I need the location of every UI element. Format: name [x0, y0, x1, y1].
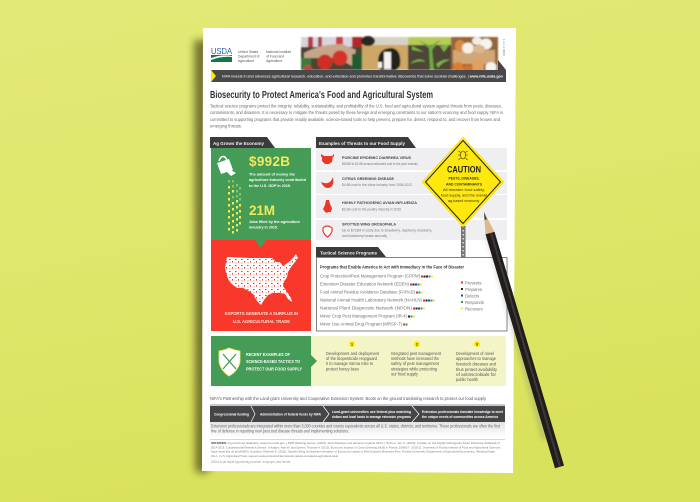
process chevron bar: Land-grant universities use federal plus matching: [332, 409, 412, 414]
program list: Food Animal Residue Avoidance Database (FARAD): [320, 290, 416, 294]
panel: ag grows the economy: [210, 137, 311, 331]
program list: Crop Protection/Pest Management Program (CPPM): [320, 274, 421, 278]
header photos: [301, 36, 498, 73]
program list: Extension Disaster Education Network (EDEN): [320, 282, 410, 286]
green tactics block: [211, 336, 317, 386]
tactic 2: safety of pest management: [391, 361, 440, 366]
threat row: porcine virus: [316, 148, 507, 170]
banner fold: [498, 60, 506, 70]
caution text: All threaten food safety,: [443, 188, 485, 192]
caution text: ag-based economy.: [448, 199, 480, 203]
green economy block: [211, 148, 311, 240]
department names: [238, 50, 291, 63]
tactic 3: public health: [456, 377, 479, 382]
tactic 1: of the biopesticide Hopguard: [326, 356, 378, 361]
intro paragraph: contaminants, and disasters. It is necessary to mitigate the threats posed by these foreign and emerging constraints to our nation's economy and food supply. NIFA is: [210, 110, 504, 115]
extension text: Extension professionals are integrated within more than 3,000 counties and county equivalents across all U.S. states, districts, and territories. These professionals are often the first: [211, 424, 501, 428]
photo: corn seedlings: [408, 37, 451, 70]
tab heading: tactical: Tactical Science Programs: [320, 250, 377, 256]
USDA logo: USDA: [211, 46, 232, 56]
tactics heading: RECENT EXAMPLES OF: [246, 352, 290, 357]
department names: Department of: [238, 54, 260, 58]
icon: chicken: [323, 200, 332, 213]
process chevron bar: dollars and local funds to manage extension programs: [332, 414, 411, 419]
sources: 2014-2015. Congressional Research Service. | Hodges, Alan W. and Spreen, Thomas H. (2012). Economic Impacts of Citrus Greening (HLB) in Florida, 2006/07 - 2010/11. University of Florida Institute of Food and Agricultural Sciences.: [211, 446, 501, 450]
threat row: citrus greening: CITRUS GREENING DISEASE: [342, 176, 394, 181]
threat row: spotted wing drosophila: Up to $718M in costs due to strawberry, raspberry, blueberry,: [342, 228, 432, 232]
tactic 3: of antimicrobials for: [456, 372, 497, 377]
legend: Prevents: [465, 280, 482, 286]
caution text: food supply, and the overall: [441, 194, 487, 198]
mission banner: NIFA invests in and advances agricultural research, education, and extension and promotes transformative discoveries that solve societal challenges. | www.nifa.usda.gov: [222, 74, 504, 78]
tactic 3: Development of novel: [456, 351, 494, 356]
legend: Responds: [465, 300, 484, 305]
stat text: money: [249, 172, 307, 188]
sign post: [461, 226, 466, 258]
tab heading: threats: Examples of Threats to our Food Supply: [319, 141, 405, 146]
tactic 3: livestock diseases and: [456, 362, 497, 366]
legend: Prepares: [465, 287, 482, 292]
sources: #11-1. | U.S. Agricultural Trade: www.ers.usda.gov/topics/international-markets-us-trade/us-agricultural-trade: [211, 454, 338, 458]
threat row: citrus greening: [316, 172, 507, 194]
tab heading: tactical: [316, 247, 386, 257]
program list: [320, 274, 423, 326]
intro paragraph: Tactical science programs protect the integrity, reliability, sustainability, and profitability of the U.S. food and agricultural system against threats from pests, diseases,: [210, 104, 502, 108]
tab heading: ag grows: [210, 137, 275, 148]
stat text: money: agriculture industry contributed: [249, 177, 307, 182]
caution word: CAUTION: [447, 164, 481, 176]
program heading: Programs that Enable America to Act with Immediacy in the Face of Disaster: [320, 264, 464, 270]
tactic 2: [391, 341, 442, 376]
threat row: citrus greening: $4.6B cost to the citrus industry from 2006-2012: [342, 183, 412, 187]
sheet shadow: [194, 40, 212, 474]
legend: Detects: [465, 294, 479, 298]
tactic 1: protect honey bees: [326, 366, 359, 372]
tactic 2: 2: [416, 342, 419, 346]
equal opportunity line: USDA is an equal opportunity provider, employer, and lender.: [211, 460, 291, 464]
tactic 3: approaches to manage: [456, 356, 497, 361]
intro paragraph: committed to supporting programs that provide readily available, science-based tools to help prevent, prepare for, detect, respond to, and recover from known and: [210, 117, 500, 122]
department names: Agriculture: [238, 59, 254, 63]
stat: 21M: 21M: [249, 203, 275, 218]
tab heading: threats: [316, 137, 416, 148]
tactic 2: methods have increased the: [391, 356, 440, 361]
extension text: [210, 422, 505, 438]
photo: tomatoes: [301, 37, 362, 73]
sheet of paper: [202, 28, 516, 473]
threat row: avian influenza: [316, 195, 507, 218]
icon: citrus slice: [321, 177, 333, 188]
legend: Recovers: [465, 306, 483, 312]
tab heading: ag grows: Ag Grows the Economy: [213, 141, 264, 146]
process chevron bar: Administration of federal funds by NIFA: [260, 412, 321, 416]
department names: United States: [238, 50, 259, 54]
stat text: jobs: Jobs filled by the agriculture: [249, 219, 301, 224]
tactic 1: II to manage Varroa mite to: [326, 361, 374, 366]
intro paragraph: [210, 104, 504, 128]
mission banner: [211, 70, 506, 82]
tactic 3: thus protect availability: [456, 367, 498, 372]
export caption: EXPORTS GENERATE A SURPLUS IN: [225, 311, 299, 316]
stat text: jobs: industry in 2015.: [249, 224, 278, 230]
program list: National Plant Diagnostic Network (NPDN): [320, 306, 413, 310]
extension text: line of defense in reporting new pest and disease threats and implementing solutions.: [211, 428, 349, 434]
pencil shadow: [486, 236, 548, 440]
icon: strawberry: [323, 226, 332, 237]
threat row: spotted wing drosophila: [316, 220, 507, 240]
icon: shield with fork and knife: [219, 348, 240, 376]
tactics heading: PROTECT OUR FOOD SUPPLY: [246, 366, 303, 372]
tactic 2: strategies while protecting: [391, 366, 438, 372]
threat row: porcine virus: $900M to $1.8B annual estimated cost to the pork industry: [342, 162, 418, 166]
icon: pig: [321, 154, 334, 164]
program list: National Animal Health Laboratory Network (NAHLN): [320, 298, 423, 302]
panel: threats to food supply: [316, 137, 507, 240]
vertical code text: 1.1.1.1 0000: [502, 39, 506, 56]
title: Biosecurity to Protect America's Food and Agricultural System: [210, 89, 433, 101]
program box: [316, 258, 507, 331]
process chevron bar: Congressional funding: [214, 412, 250, 416]
department names: Agriculture: [266, 59, 282, 63]
stat text: money: The amount of money the: [249, 172, 296, 176]
process chevron bar: the unique needs of communities across America: [422, 414, 499, 419]
tactic 1: [326, 341, 380, 372]
icon: bug: [458, 151, 468, 160]
process chevron bar: Extension professionals translate knowledge to meet: [422, 409, 504, 414]
tactic 2: Integrated pest management: [391, 351, 442, 356]
red exports block: [211, 240, 311, 331]
caution text: [441, 176, 487, 203]
process chevron bar: [210, 404, 505, 422]
department names: of Food and: [266, 54, 284, 58]
icon: watering can: [217, 156, 236, 176]
icon: falling crop dots: [228, 180, 241, 234]
photo: eggs in crate: [451, 37, 498, 73]
sources: SOURCES: Ag and Food Statistics: www.ers.usda.gov. | PPD Working Group. (2015). Pest Disease new adverse impacts 2014. | Sinnen, Jen A. (2016). Update on the Highly Pathogenic Avian Influenza Outbreak of: [211, 441, 500, 445]
tactic 1: 1: [351, 342, 354, 346]
department names: National Institute: [266, 50, 291, 54]
USDA logo: [211, 46, 232, 62]
pencil: [484, 212, 564, 468]
pointer: [255, 240, 266, 248]
tactics heading: SCIENCE-BASED TACTICS TO: [246, 359, 300, 364]
tactics heading: [246, 352, 303, 372]
threat row: spotted wing drosophila: and blackberry losses annually: [342, 234, 387, 238]
caution text: AND CONTAMINANTS: [446, 182, 482, 186]
caution sign: [422, 137, 504, 258]
program list: Minor Crop Pest Management Program (IR-4): [320, 314, 408, 318]
panel: recent tactics: [211, 336, 506, 386]
stat text: jobs: [249, 219, 301, 230]
threat row: porcine virus: PORCINE EPIDEMIC DIARRHEA VIRUS: [342, 155, 411, 160]
threat row: avian influenza: HIGHLY PATHOGENIC AVIAN INFLUENZA: [342, 200, 417, 205]
export caption: U.S. AGRICULTURAL TRADE: [233, 319, 290, 324]
panel: tactical science programs: [316, 247, 507, 331]
threat row: spotted wing drosophila: SPOTTED WING DROSOPHILA: [342, 222, 396, 226]
icon: USA map: [225, 254, 298, 305]
tactic 3: [456, 341, 498, 382]
sources: [211, 441, 501, 458]
program tactic squares: [403, 276, 435, 326]
intro paragraph: emerging threats.: [210, 124, 242, 128]
tactic 3: 3: [476, 342, 479, 346]
sources: https://edis.ifas.ufl.edu/fe903 | Goodhue, Rachael E. (2011). Spotted Wing Drosophila Infestation of Economic Impact of Pest Systems Business Free. Purdue University, Department of Agricultural Economics. Working Paper: [211, 450, 495, 454]
export caption: [225, 311, 299, 324]
partnership heading: NIFA's Partnership with the Land-grant University and Cooperative Extension System: Boots on the ground translating research to protect our food supply: [210, 396, 487, 401]
light yellow tactics band: [311, 336, 506, 386]
threat row: avian influenza: $3.3B cost to the poultry industry in 2015: [342, 208, 401, 212]
stat: $992B: $992B: [249, 154, 290, 169]
program list: Minor Use Animal Drug Program (MRSP-7): [320, 322, 403, 326]
caution text: PESTS, DISEASES,: [448, 176, 480, 180]
sign diamond: [422, 137, 504, 227]
legend: [461, 280, 484, 312]
stat text: money: to the U.S. GDP in 2015.: [249, 183, 291, 188]
tactic 2: our food supply: [391, 372, 419, 376]
tactic 1: Development and deployment: [326, 351, 380, 356]
photo: calf: [361, 36, 408, 70]
